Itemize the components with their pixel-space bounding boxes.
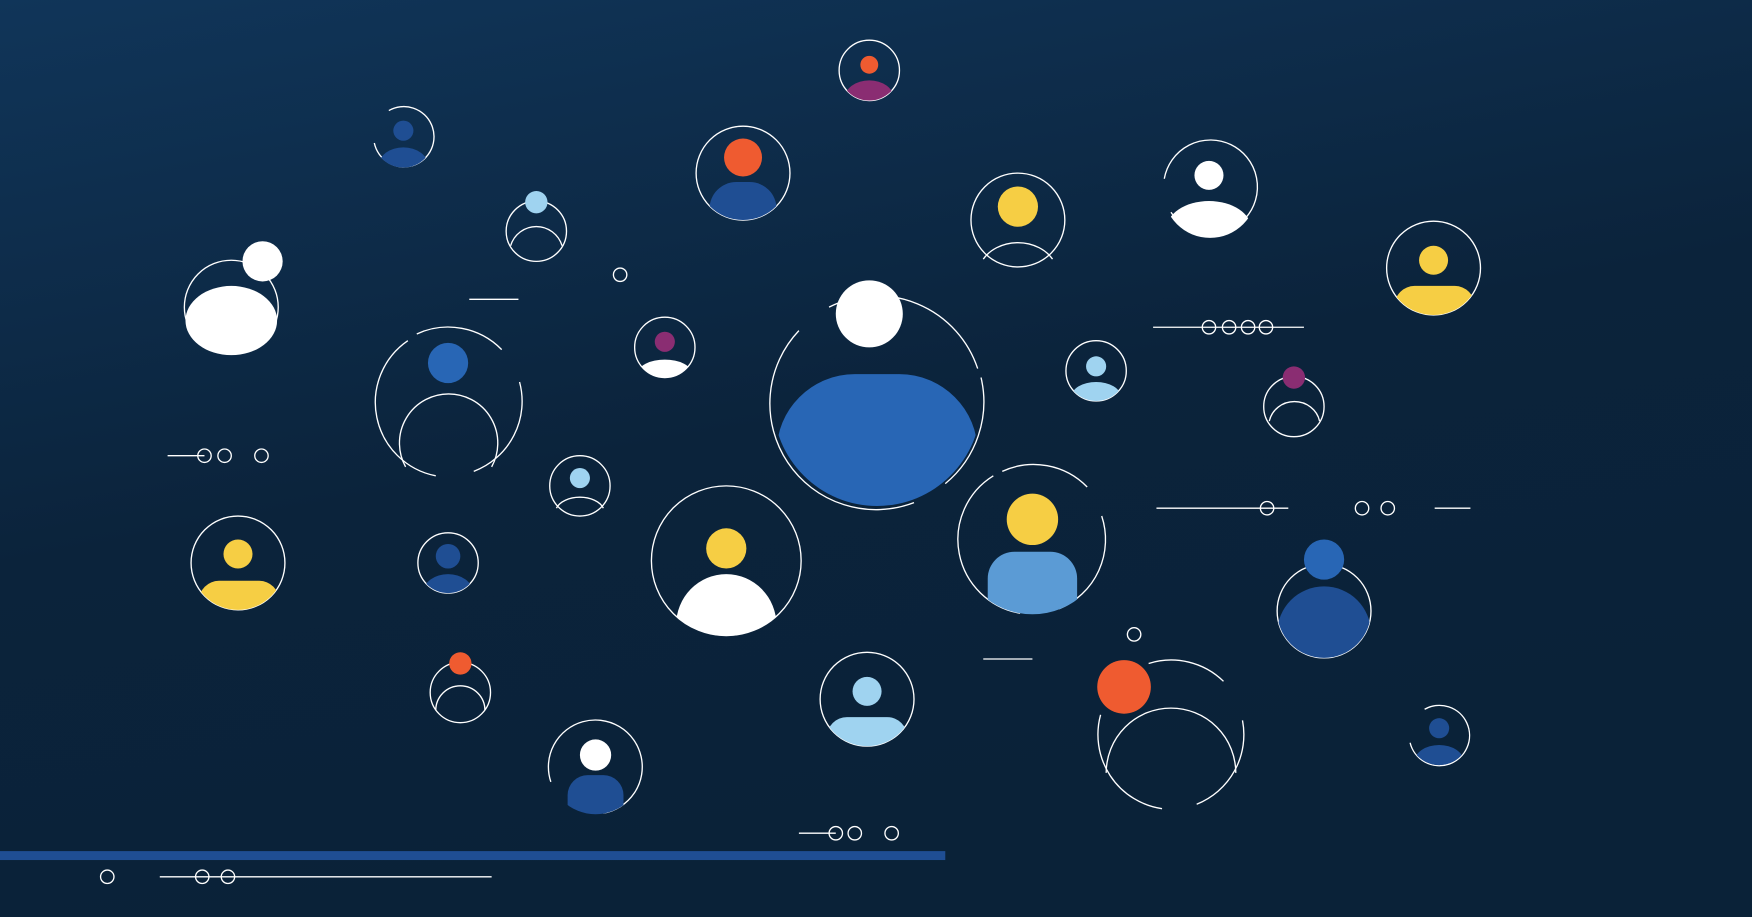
avatar 20 [430,652,491,723]
bottom bar [0,851,945,860]
avatar 9 [375,327,522,476]
avatar 6 [1386,220,1482,316]
avatar 15 [190,515,286,610]
avatar 18 [958,464,1106,630]
avatar 14 [550,456,610,516]
avatar 7 [506,191,566,261]
avatar 12 [1066,341,1126,411]
avatar 8 [184,241,283,355]
avatar 16 [417,532,479,594]
avatar 5 [1164,139,1258,238]
avatar 3 [695,126,791,221]
avatar 19 [1276,540,1372,658]
avatar 2 [374,106,435,168]
avatar 13 [1264,366,1324,437]
avatar 10 [635,317,695,386]
avatar 22 [819,652,915,747]
avatar 17 [650,485,802,636]
avatar 1 [838,40,900,102]
decorative lines [469,298,518,300]
avatar 11 (large central) [770,280,984,531]
avatar 21 [548,719,643,814]
avatar 24 [1410,704,1470,766]
avatar 23 [1097,660,1244,809]
avatar 4 [971,173,1065,267]
